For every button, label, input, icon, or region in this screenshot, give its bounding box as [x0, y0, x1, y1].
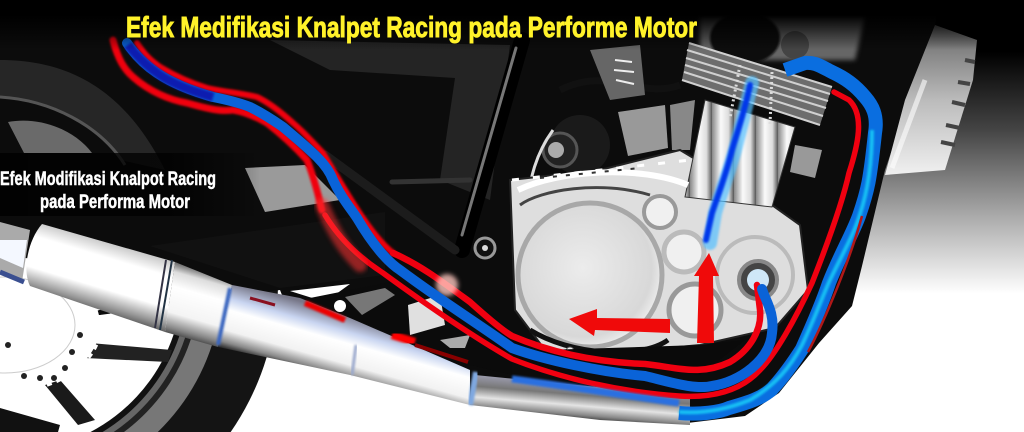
upper engine parts: [528, 12, 865, 200]
engine cylinder block: [685, 100, 795, 207]
hot exhaust flow lines: red: [113, 40, 859, 396]
engine crankcase: [510, 150, 808, 352]
wheel opening grey patch: [8, 121, 92, 153]
sprocket: [0, 259, 100, 391]
top fade: [0, 0, 1024, 50]
engine casing details: [512, 160, 793, 357]
swingarm: [150, 212, 385, 288]
lower engine dark area and footpeg parts: [290, 280, 745, 375]
subtitle: pada Performa Motor: [40, 192, 190, 213]
subtitle band: [0, 153, 260, 216]
motorcycle rear wheel: [0, 12, 278, 432]
rear fender: [0, 60, 165, 170]
radiator: [885, 25, 977, 175]
frame tubes: [325, 40, 522, 258]
exhaust muffler pipe: [0, 222, 690, 425]
rear fender rim arc: [0, 97, 125, 165]
red arrow: left: [569, 309, 670, 336]
red arrow: up: [694, 253, 719, 343]
side panel: [270, 40, 510, 200]
cool air flow lines: blue: [127, 43, 876, 414]
subtitle: Efek Modifikasi Knalpot Racing: [0, 169, 216, 190]
cooling fins: [682, 43, 832, 125]
grey battery panel: [245, 165, 340, 212]
title: Efek Medifikasi Knalpet Racing pada Performe Motor: [126, 12, 697, 44]
subtitle: [0, 169, 216, 213]
